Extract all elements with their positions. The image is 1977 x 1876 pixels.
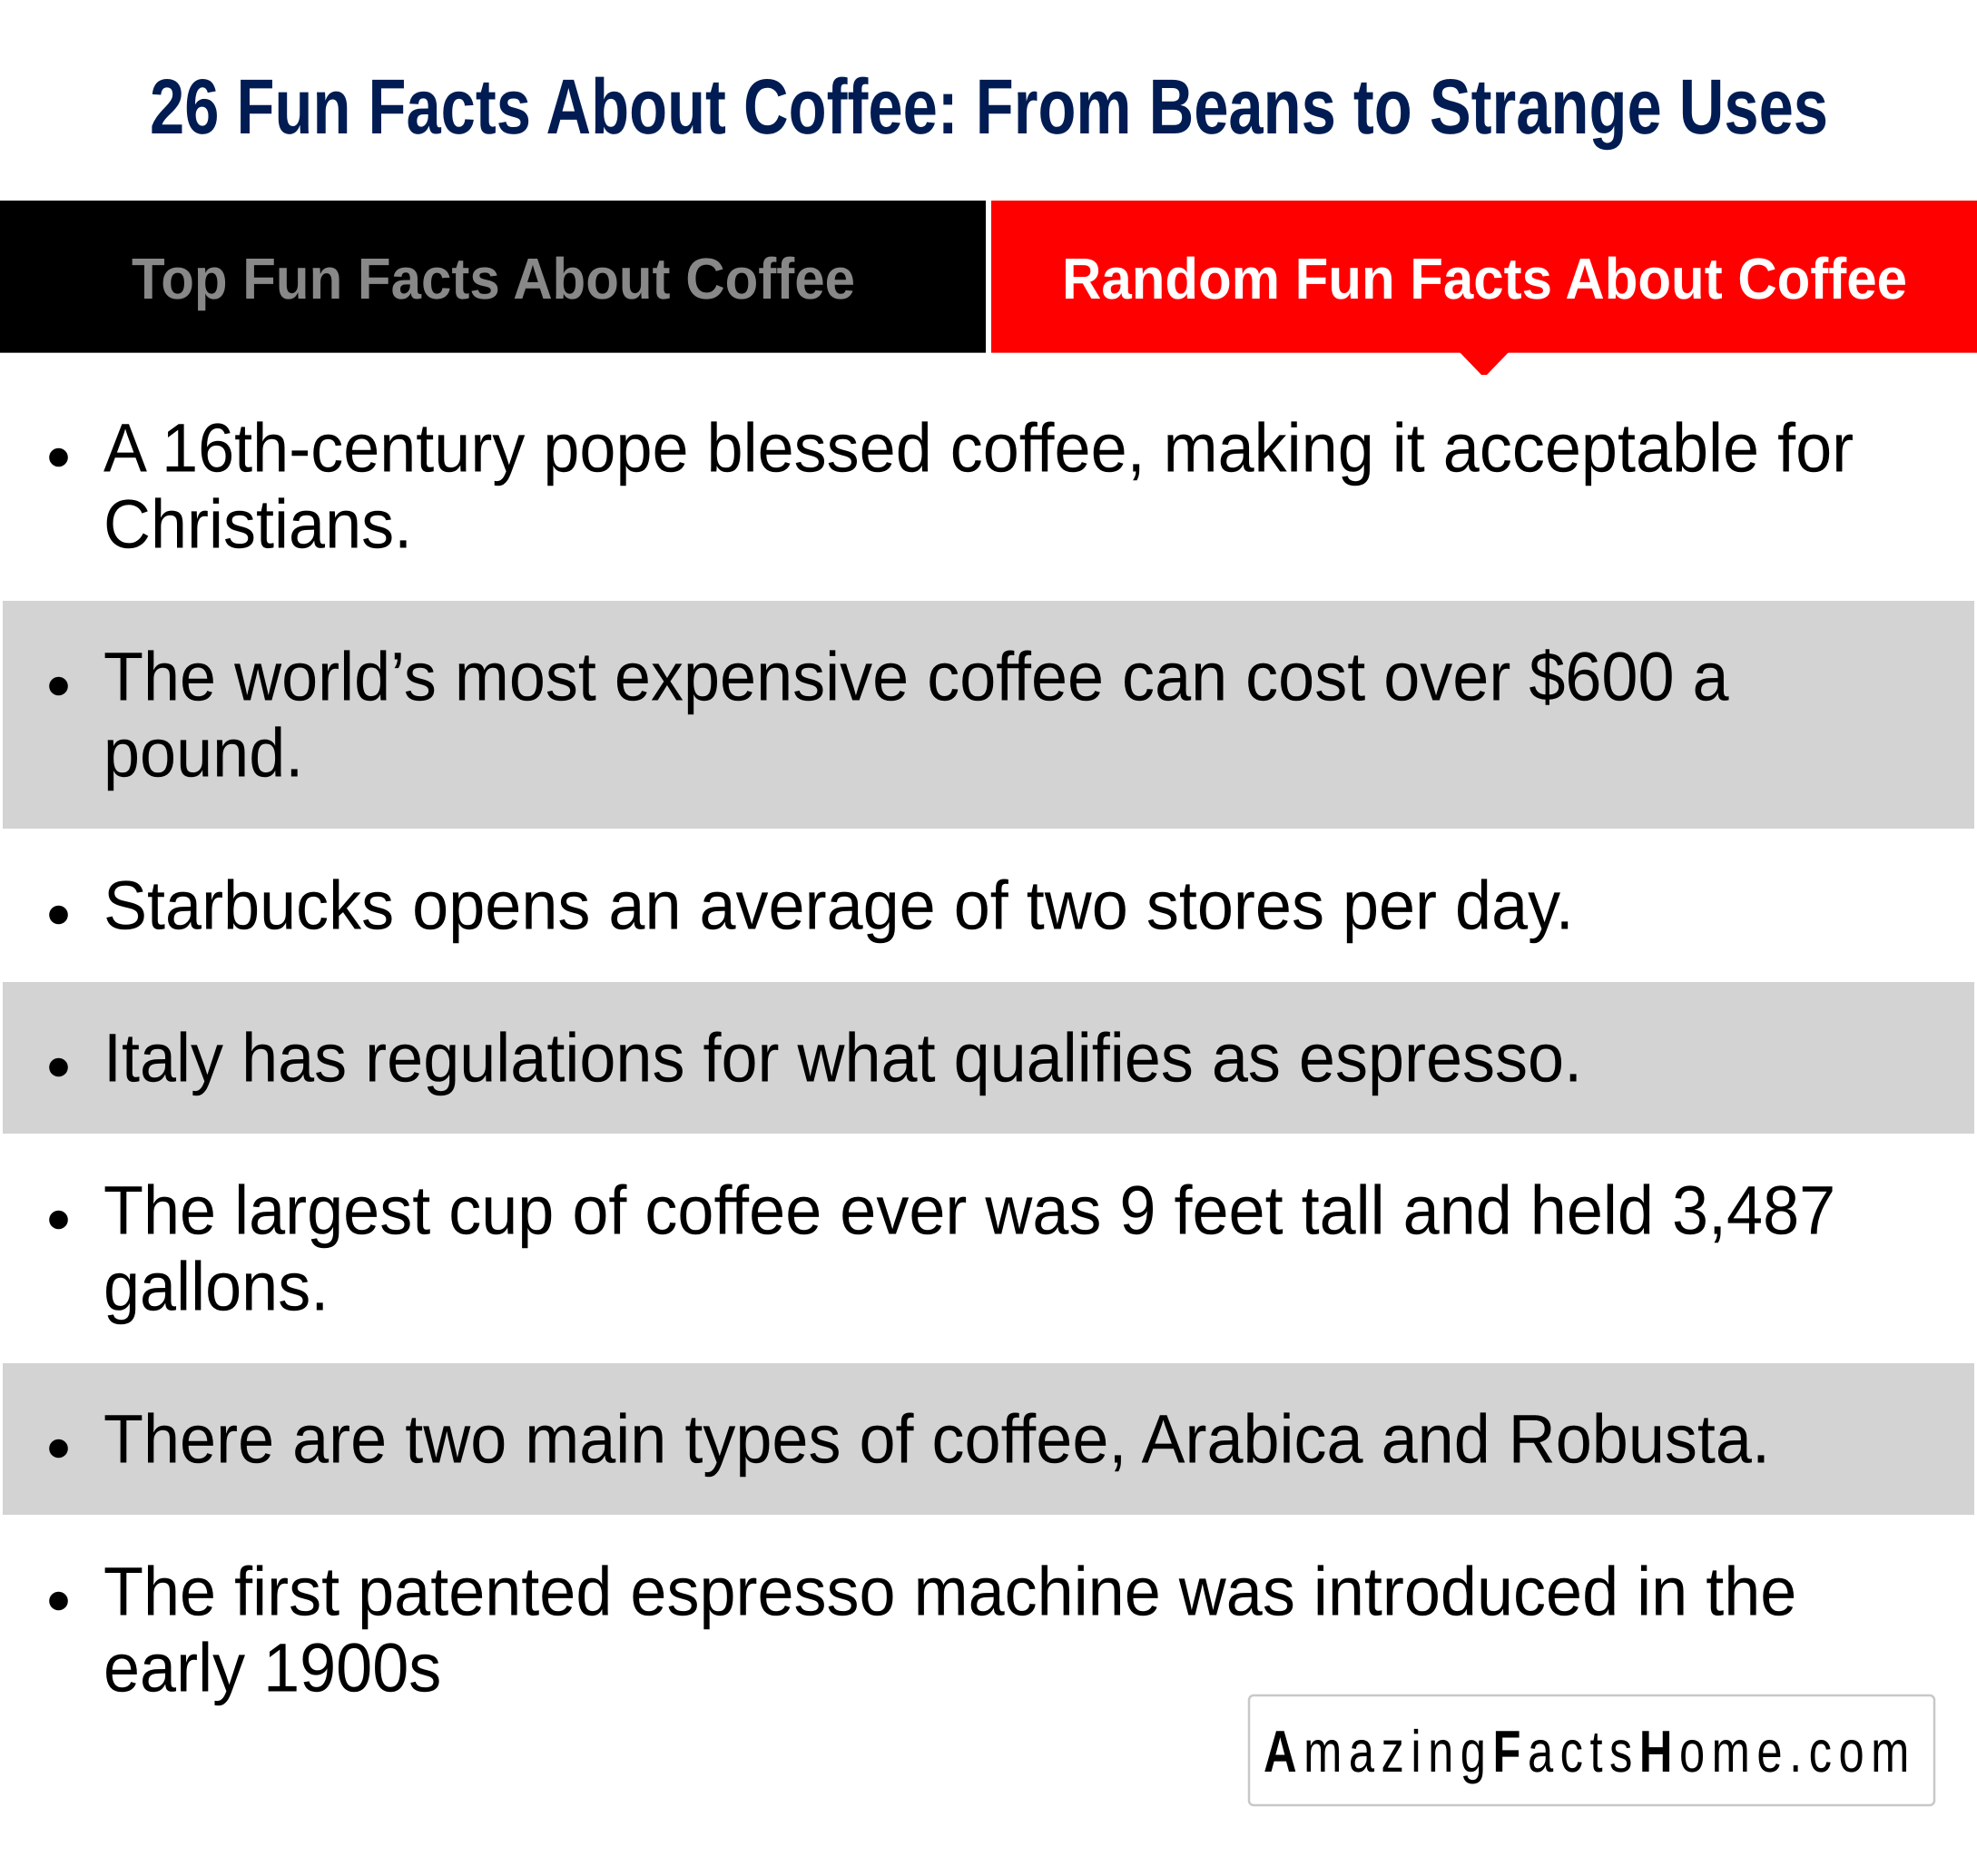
fact row 2: pound.: [103, 715, 303, 791]
tab: random fun facts (active): [991, 201, 1977, 375]
tab label: random fun facts: Random Fun Facts About Coffee: [1062, 246, 1907, 311]
fact row 7: [49, 1554, 1796, 1706]
fact row 2: [3, 601, 1974, 829]
tab label: top fun facts: Top Fun Facts About Coffee: [132, 246, 855, 311]
fact row 1: Christians.: [103, 486, 412, 563]
fact row 2: The world’s most expensive coffee can cost over $600 a: [103, 639, 1729, 715]
tab: top fun facts (inactive): [0, 201, 986, 353]
fact row 5: gallons.: [103, 1249, 329, 1325]
fact row 4: Italy has regulations for what qualifies as espresso.: [103, 1020, 1582, 1096]
fact row 7: The first patented espresso machine was introduced in the: [103, 1554, 1796, 1630]
fact row 5: The largest cup of coffee ever was 9 feet tall and held 3,487: [103, 1173, 1835, 1249]
fact row 6: There are two main types of coffee, Arabica and Robusta.: [103, 1401, 1770, 1478]
fact row 1: A 16th-century pope blessed coffee, making it acceptable for: [103, 410, 1854, 486]
fact row 7: early 1900s: [103, 1630, 441, 1706]
fact row 6: [3, 1363, 1974, 1515]
watermark: AmazingFactsHome.com: AmazingFactsHome.com: [1264, 1718, 1916, 1784]
fact row 4: [3, 982, 1974, 1134]
fact row 1: [49, 410, 1854, 563]
watermark: AmazingFactsHome.com: [1249, 1695, 1934, 1805]
fact row 5: [49, 1173, 1835, 1325]
fact row 3: Starbucks opens an average of two stores per day.: [103, 868, 1574, 944]
